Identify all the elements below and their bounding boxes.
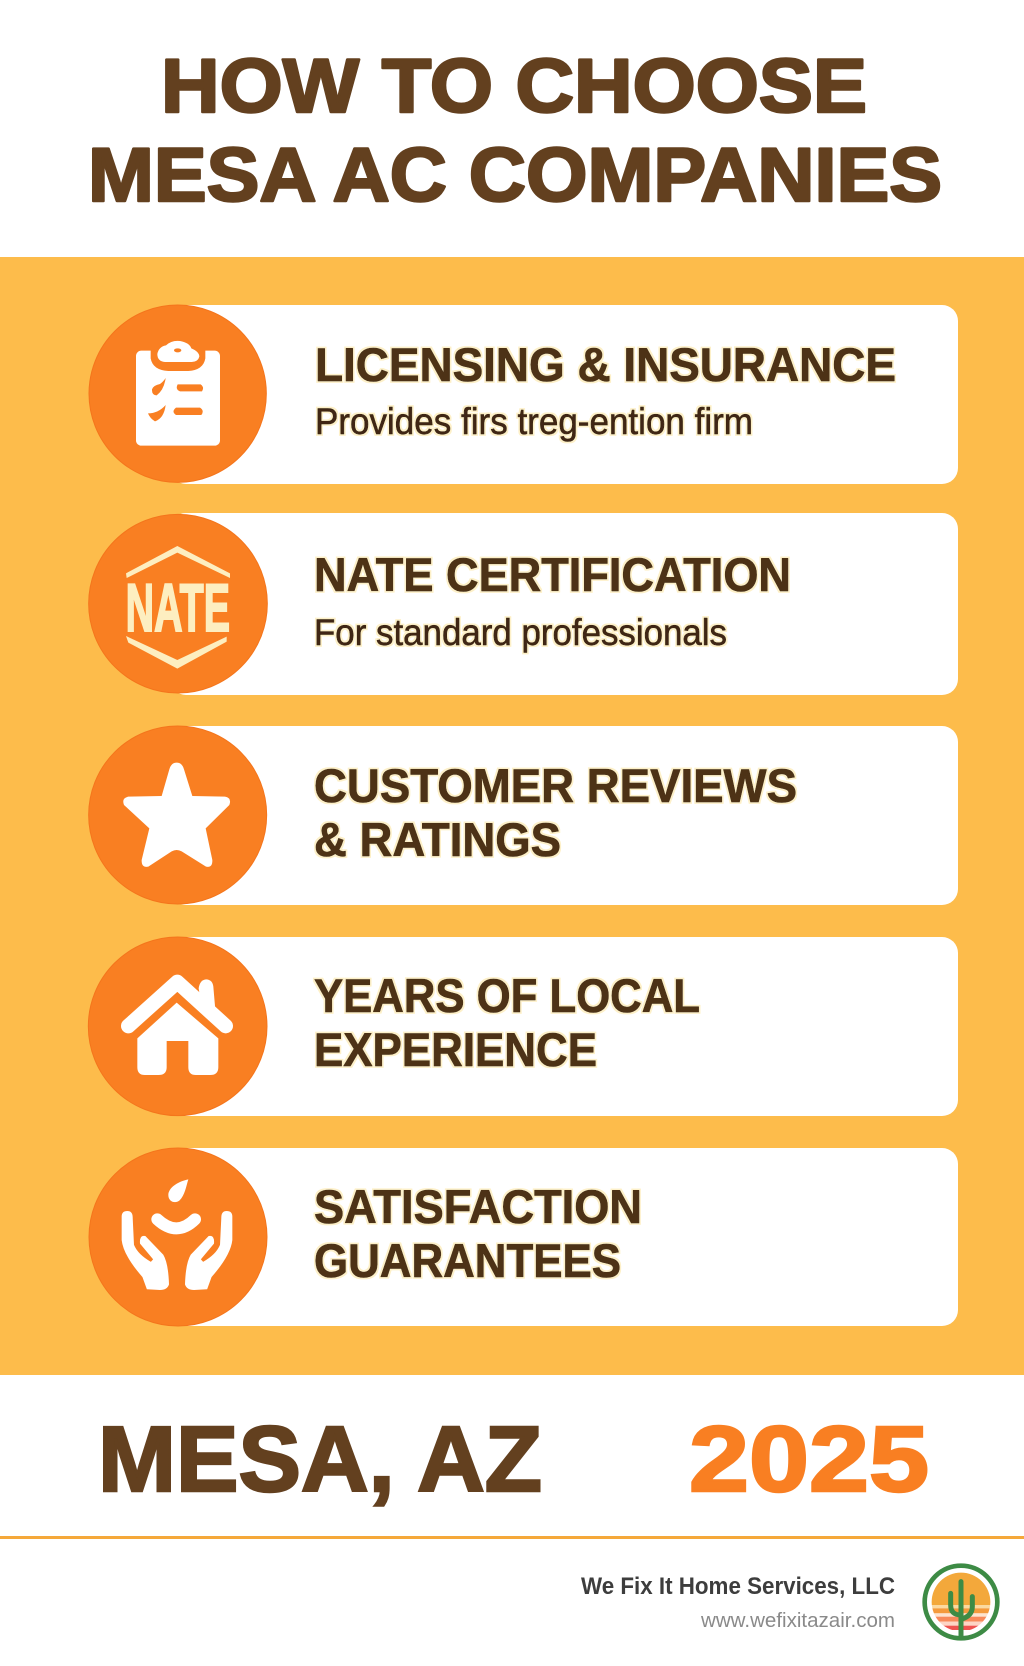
panel: customer reviews: & RATINGS (314, 813, 561, 866)
divider line (0, 1536, 1024, 1539)
icon: star (89, 726, 267, 904)
panel: licensing and insurance (89, 305, 958, 484)
year label: 2025 (689, 1407, 929, 1511)
description: For standard professionals (314, 612, 727, 653)
icon: house (88, 937, 267, 1116)
icon: clipboard (89, 305, 266, 482)
panel: yellow band (0, 257, 1024, 1375)
card background (170, 1148, 958, 1326)
icon: NATE badge (89, 514, 267, 693)
panel: satisfaction guarantees: GUARANTEES (314, 1234, 621, 1287)
card background (170, 305, 958, 484)
icon: hands and drop (89, 1148, 267, 1326)
heading: YEARS OF LOCAL (314, 969, 700, 1022)
heading: SATISFACTION (314, 1180, 642, 1233)
company name: We Fix It Home Services, LLC (581, 1573, 895, 1600)
icon: NATE badge: NATE (126, 571, 230, 646)
location label: MESA, AZ (98, 1407, 542, 1511)
heading: LICENSING & INSURANCE (315, 338, 896, 391)
card background (170, 726, 958, 905)
panel: years of local experience: EXPERIENCE (314, 1023, 597, 1076)
heading: NATE CERTIFICATION (314, 548, 791, 601)
title: HOW TO CHOOSE (161, 44, 867, 129)
panel: years of local experience (88, 937, 958, 1116)
title: MESA AC COMPANIES (88, 133, 942, 218)
icon: cactus logo (925, 1566, 997, 1638)
panel: satisfaction guarantees (89, 1148, 958, 1326)
card background (170, 937, 958, 1116)
description: Provides firs treg-ention firm (315, 401, 753, 442)
website: www.wefixitazair.com (700, 1610, 895, 1632)
card background (170, 513, 958, 695)
heading: CUSTOMER REVIEWS (314, 759, 797, 812)
panel: NATE certification (89, 513, 958, 695)
title (88, 44, 942, 218)
panel: customer reviews (89, 726, 958, 905)
